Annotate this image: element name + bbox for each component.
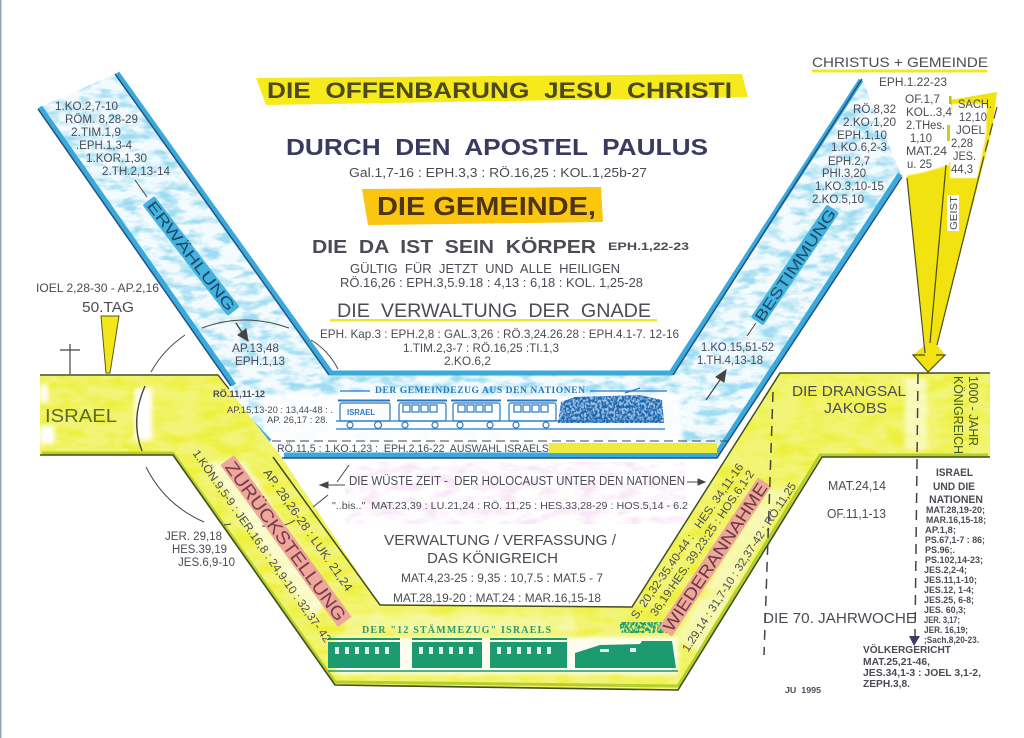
text block: nations references: PS.67,1-7 : 86; — [925, 535, 985, 546]
text block: nations references: JES.12, 1-4; — [924, 585, 974, 596]
text block: revelation references: KOL..3,4 — [906, 107, 953, 119]
label: Zurückstellung: ZURÜCKSTELLUNG — [221, 458, 350, 625]
text block: die da ist sein Körper: GÜLTIG FÜR JETZT UND ALLE HEILIGEN — [350, 261, 620, 276]
text block: Jacob's trouble: JAKOBS — [824, 400, 887, 417]
text block: grace references — [320, 327, 679, 368]
text block: nations references: PS.96;. — [925, 545, 955, 556]
text block: election references: .EPH.1,3-4 — [76, 138, 132, 152]
arrow: rapture — [706, 370, 726, 400]
heading: Christ and church — [812, 54, 988, 89]
heading: die Gemeinde — [362, 187, 603, 225]
text block: destiny references: EPH.2,7 — [828, 156, 870, 168]
text block: Jeremiah references — [165, 531, 235, 569]
text block: kingdom administration — [384, 532, 617, 605]
panel: yellow Israel band — [40, 373, 990, 690]
text block: Acts 13: AP.13,48 — [232, 343, 279, 355]
text block: grace references: 2.KO.6,2 — [444, 354, 491, 368]
label: thousand-year kingdom — [951, 376, 981, 454]
text block: nations references: MAR.16,15-18; — [926, 515, 986, 526]
text block: destiny references: PHI.3,20 — [822, 168, 866, 180]
text block: kingdom administration: MAT.28,19-20 : MAT.24 : MAR.16,15-18 — [393, 591, 601, 605]
text block: rapture references: 1.KO.15,51-52 — [701, 342, 774, 354]
text block: revelation references: OF.1,7 — [905, 94, 940, 106]
arrow: 50th day — [101, 316, 119, 373]
text: Romans 11,25 rotated: 1.29,14 : 31,7-10 : 32,37-42 : RÖ.11,25 — [681, 481, 799, 654]
text block: judgement of nations — [863, 643, 981, 690]
label: Wiederannahme: WIEDERANNAHME — [659, 479, 771, 635]
text block: Israel and the nations: NATIONEN — [929, 494, 983, 506]
text block: die da ist sein Körper: RÖ.16,26 : EPH.3,5.9.18 : 4,13 : 6,18 : KOL. 1,25-28 — [340, 276, 643, 290]
icon: cross — [60, 344, 80, 374]
text block: kingdom administration: MAT.4,23-25 : 9,35 : 10,7.5 : MAT.5 - 7 — [401, 571, 603, 585]
text: Acts 28 rotated: AP. 28,26-28 : LUK. 21,24 — [260, 466, 356, 594]
train: twelve tribes train: DER "12 STÄMMEZUG" ISRAELS — [362, 623, 551, 636]
text block: desert time: "..bis.." MAT.23,39 : LU.21,24 : RÖ. 11,25 : HES.33,28-29 : HOS.5,14 - 6.2 — [332, 500, 688, 512]
text block: judgement of nations: JES.34,1-3 : JOEL 3,1-2, — [863, 667, 981, 679]
text block: revelation references: 2.THes. — [906, 120, 945, 132]
text block: Israel and the nations: ISRAEL — [936, 467, 973, 479]
text block: destiny references: 1.KO.6,2-3 — [831, 142, 887, 154]
text block: Romans 11 references: AP.15,13-20 : 13,44-48 : . — [227, 405, 333, 416]
text block: revelation references: u. 25 — [907, 159, 932, 171]
title — [256, 74, 748, 105]
text block: nations references: ;Sach.8,20-23. — [924, 635, 979, 646]
text block: nations references: AP.1,8; — [925, 525, 956, 536]
text block: Romans 11 references: AP. 26,17 : 28. — [267, 415, 328, 426]
panel: blue church band — [38, 73, 902, 458]
text block: destiny references: 1.KO.3,10-15 — [815, 181, 884, 193]
label: thousand-year kingdom: 1000 - JAHR — [966, 376, 981, 446]
text block: nations references: JES.11,1-10; — [924, 575, 977, 586]
text block: nations references: JER. 3,17; — [924, 615, 960, 626]
text block: selection of Israel: RÖ.11,5 : 1.KO.1,23 : EPH.2,16-22 AUSWAHL ISRAELS — [277, 443, 549, 455]
text block: Romans 11 references: RÖ.11,11-12 — [213, 389, 265, 400]
text block: nations references: JES. 60,3; — [924, 605, 966, 616]
panel: pink desert-time tint — [345, 462, 685, 524]
label: Erwählung: ERWÄHLUNG — [143, 198, 238, 315]
text block: Romans 11 references — [213, 389, 333, 426]
text block: revelation references: 1,10 — [910, 133, 932, 145]
text block: revelation references — [905, 94, 953, 171]
text: Ezekiel 36 rotated: 36,19:HES. 39,23:25 : HOS.6,1-2 — [649, 468, 757, 619]
text block: election references: 2.TH.2,13-14 — [102, 164, 170, 178]
label: thousand-year kingdom: KÖNIGREICH — [951, 376, 966, 454]
text block: kingdom administration: DAS KÖNIGREICH — [427, 549, 558, 567]
text block: nations references: JES.2,2-4; — [924, 565, 967, 576]
signature: JU 1995 — [785, 686, 822, 695]
heading: Christ and church: CHRISTUS + GEMEINDE — [812, 54, 988, 70]
label: Bestimmung — [751, 204, 841, 327]
label: Bestimmung: BESTIMMUNG — [752, 206, 840, 325]
heading: durch den Apostel Paulus — [286, 134, 708, 180]
text block: judgement of nations: ZEPH.3,8. — [863, 678, 910, 690]
text block: grace references: 1.TIM.2,3-7 : RÖ.16,25 :TI.1,3 — [403, 341, 559, 355]
text block: judgement of nations: MAT.25,21-46, — [863, 656, 930, 668]
text block: desert time: DIE WÜSTE ZEIT - DER HOLOCAUST UNTER DEN NATIONEN — [349, 474, 685, 488]
text block: die da ist sein Körper: DIE DA IST SEIN KÖRPER — [312, 237, 596, 257]
text block: destiny references: 2.KO.1,20 — [843, 117, 896, 129]
heading: durch den Apostel Paulus: Gal.1,7-16 : EPH.3,3 : RÖ.16,25 : KOL.1,25b-27 — [349, 165, 647, 180]
train: twelve tribes train — [328, 622, 678, 671]
heading: Christ and church: EPH.1.22-23 — [879, 77, 947, 89]
heading: durch den Apostel Paulus: DURCH DEN APOSTEL PAULUS — [286, 134, 708, 160]
text block: rapture references: 1.TH.4,13-18 — [697, 355, 763, 367]
text block: destiny references — [812, 104, 896, 206]
text block: Israel and the nations: UND DIE — [933, 481, 975, 493]
text block: nations references: JER. 16,19; — [924, 625, 968, 636]
train: church train: DER GEMEINDEZUG AUS DEN NATIONEN — [375, 386, 585, 396]
text block: revelation references: MAT.24 — [906, 146, 948, 158]
heading: die Gemeinde: DIE GEMEINDE, — [377, 191, 596, 221]
text block: Jacob's trouble: DIE DRANGSAL — [792, 383, 906, 400]
text block: Matthew 24 and Revelation 11: OF.11,1-13 — [827, 506, 886, 521]
arrow: election — [236, 323, 248, 341]
text block: prophets references: 12,10 — [959, 112, 987, 124]
text block: prophets references: 2,28 — [951, 138, 973, 150]
heading: die Verwaltung der Gnade: DIE VERWALTUNG DER GNADE — [337, 301, 651, 322]
text block: election references — [55, 99, 170, 178]
dashed timeline: seventy weeks — [764, 392, 773, 655]
text block: destiny references: EPH.1,10 — [837, 130, 887, 142]
text block: Joel and 50th day — [36, 281, 159, 316]
arrow: large yellow spirit funnel — [903, 92, 997, 372]
text block: nations references: JES.25, 6-8; — [924, 595, 974, 606]
text block: kingdom administration: VERWALTUNG / VERFASSUNG / — [384, 532, 617, 549]
text block: grace references: EPH. Kap.3 : EPH.2,8 : GAL.3,26 : RÖ.3,24.26.28 : EPH.4.1-7. 12-16 — [320, 327, 679, 341]
text block: Jeremiah references: JES.6,9-10 — [178, 557, 235, 569]
text block: prophets references — [951, 99, 992, 176]
train: church train — [336, 386, 667, 429]
text block: Acts 13 — [232, 343, 285, 368]
text block: judgement of nations: VÖLKERGERICHT — [863, 643, 952, 656]
arcs: circle around grafting — [137, 320, 349, 526]
text block: Jeremiah references: JER. 29,18 — [165, 531, 222, 543]
train: church train: ISRAEL — [347, 408, 375, 417]
text block: destiny references: RÖ.8,32 — [853, 104, 896, 116]
text block: Matthew 24 and Revelation 11: MAT.24,14 — [828, 478, 886, 493]
text block: election references: 2.TIM.1,9 — [71, 125, 121, 139]
text block: desert time — [320, 474, 705, 512]
text block: nations references — [924, 505, 986, 646]
arrow: large yellow spirit funnel: GEIST — [948, 195, 960, 230]
dashed separator — [272, 440, 730, 442]
text block: Jacob's trouble — [792, 383, 906, 417]
text block: election references: RÖM. 8,28-29 — [65, 112, 138, 126]
text: Kings rotated: 1.KÖN.9,5-9 : JER.16,8 : 24,9-10 : 32,37- 42 — [190, 448, 333, 645]
text block: nations references: MAT.28,19-20; — [926, 505, 985, 516]
text block: Joel and 50th day: 50.TAG — [82, 299, 134, 316]
text block: Acts 13: EPH.1,13 — [235, 356, 285, 368]
text block: prophets references: JOEL — [956, 125, 986, 137]
text block: nations references: PS.102,14-23; — [925, 555, 983, 566]
text block: rapture references — [697, 342, 774, 367]
label: Israel: ISRAEL — [45, 406, 117, 426]
text block: die da ist sein Körper: EPH.1,22-23 — [608, 241, 689, 253]
text block: prophets references: JES. — [953, 151, 976, 163]
dashed timeline: kingdom with arrow — [909, 374, 920, 646]
text block: die da ist sein Körper — [312, 237, 689, 290]
text block: destiny references: 2.KO.5,10 — [812, 194, 864, 206]
label: seventy weeks: DIE 70. JAHRWOCHE — [763, 610, 916, 627]
text block: Matthew 24 and Revelation 11 — [827, 478, 886, 521]
text block: Jeremiah references: HES.39,19 — [172, 544, 227, 556]
text block: selection of Israel — [277, 443, 717, 455]
text block: Joel and 50th day: IOEL 2,28-30 - AP.2,16 — [36, 281, 159, 295]
text block: election references: 1.KOR.1,30 — [86, 151, 147, 165]
label: Erwählung — [141, 196, 240, 317]
title: DIE OFFENBARUNG JESU CHRISTI — [267, 78, 732, 103]
text block: election references: 1.KO.2,7-10 — [55, 99, 118, 113]
text: Ezekiel 34 rotated: S. 20,32-35.40-44 : HES. 34,11-16 — [629, 462, 746, 622]
text block: Israel and the nations — [929, 467, 983, 506]
text block: prophets references: SACH. — [958, 99, 992, 111]
text block: prophets references: 44,3 — [951, 164, 973, 176]
